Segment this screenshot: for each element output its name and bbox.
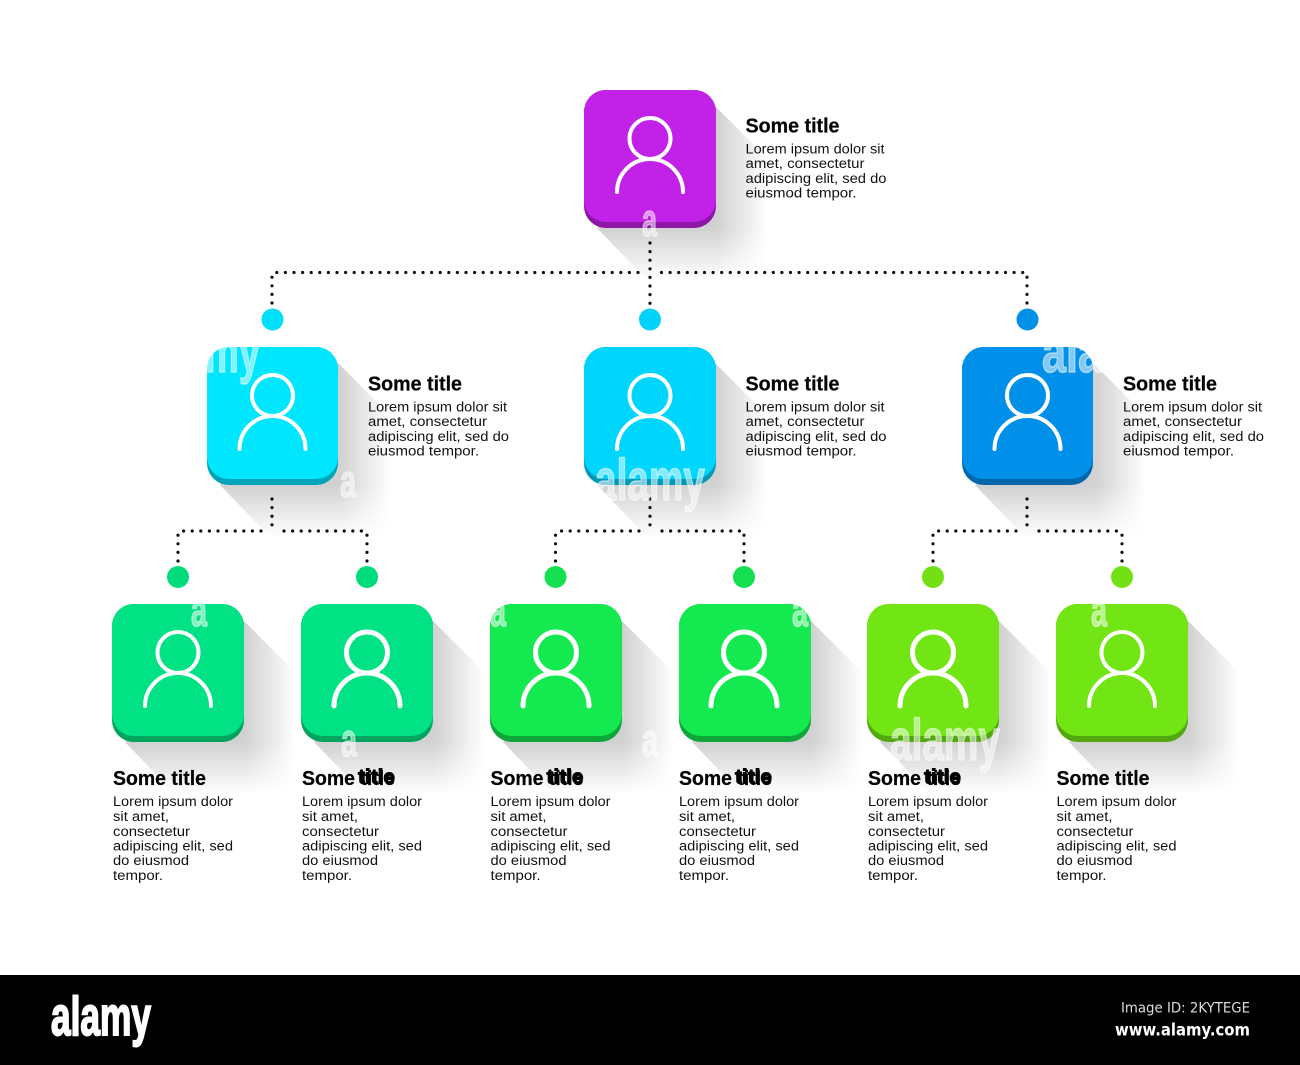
image watermarks: a xyxy=(642,194,657,246)
title: middle right: Some title xyxy=(1123,374,1217,396)
title: bottom 1: Some title xyxy=(113,768,206,790)
node: middle left xyxy=(207,347,509,537)
body: bottom 4: adipiscing elit, sed xyxy=(679,838,799,854)
connector dot: left xyxy=(262,308,284,330)
body: bottom 3 xyxy=(490,794,611,883)
image watermarks xyxy=(191,194,1107,773)
body: bottom 2: do eiusmod xyxy=(302,853,378,868)
body: top node: eiusmod tempor. xyxy=(746,186,856,200)
connector dot: centre xyxy=(639,308,661,330)
connector dot: bottom 4 xyxy=(733,566,755,588)
body: middle centre: eiusmod tempor. xyxy=(746,444,856,458)
body: bottom 5: do eiusmod xyxy=(868,853,944,868)
body: bottom 3: sit amet, xyxy=(490,809,546,824)
title smudge: bottom 4: title xyxy=(735,766,772,788)
title smudge: bottom 3: title xyxy=(546,766,584,788)
body: middle right: amet, consectetur xyxy=(1123,414,1243,429)
body: bottom 6: tempor. xyxy=(1056,868,1106,883)
body: top node: adipiscing elit, sed do xyxy=(746,171,886,186)
body: bottom 2: Lorem ipsum dolor xyxy=(302,794,423,809)
card: cyan person xyxy=(207,347,391,537)
title: top node: Some title xyxy=(746,116,840,138)
body: bottom 2: tempor. xyxy=(302,868,352,883)
body: bottom 6 xyxy=(1056,794,1177,883)
body: bottom 1: consectetur xyxy=(113,824,191,839)
title: bottom 3: Some title xyxy=(490,768,584,790)
body: bottom 6: adipiscing elit, sed xyxy=(1056,838,1176,854)
body: top node: Lorem ipsum dolor sit xyxy=(746,142,885,156)
title: bottom 5: Some title xyxy=(868,768,961,790)
node: bottom 3 xyxy=(490,604,674,883)
connector dot: bottom 2 xyxy=(356,566,378,588)
body: bottom 3: do eiusmod xyxy=(490,853,566,868)
card: sky person xyxy=(584,347,768,537)
body: bottom 2: sit amet, xyxy=(302,809,358,824)
body: middle centre: adipiscing elit, sed do xyxy=(746,429,886,444)
body: bottom 4: consectetur xyxy=(679,824,757,839)
body: bottom 1: tempor. xyxy=(113,868,163,883)
body: middle centre: Lorem ipsum dolor sit xyxy=(746,400,885,414)
image watermarks: ala xyxy=(1042,320,1103,385)
card: green person 2 xyxy=(301,604,485,794)
body: bottom 2: consectetur xyxy=(302,824,380,839)
image watermarks: a xyxy=(490,584,506,636)
body: middle left: adipiscing elit, sed do xyxy=(368,429,509,444)
card: green person 3 xyxy=(490,604,674,794)
body: bottom 5: Lorem ipsum dolor xyxy=(868,794,989,809)
body: bottom 4: tempor. xyxy=(679,868,729,883)
image watermarks: a xyxy=(1091,584,1107,636)
top level connector lines xyxy=(272,243,1027,304)
body: bottom 1: sit amet, xyxy=(113,809,169,824)
node: bottom 4 xyxy=(679,604,863,883)
card: blue person xyxy=(962,347,1146,537)
image watermarks: my xyxy=(205,320,260,385)
body: bottom 5: consectetur xyxy=(868,824,946,839)
body: bottom 5: sit amet, xyxy=(868,809,924,824)
body: bottom 3: Lorem ipsum dolor xyxy=(490,794,611,809)
body: bottom 4: sit amet, xyxy=(679,809,735,824)
node: bottom 5 xyxy=(867,604,1051,883)
body: bottom 6: sit amet, xyxy=(1056,809,1112,824)
node: middle centre xyxy=(584,347,886,537)
title: middle centre: Some title xyxy=(746,374,840,396)
title: middle left: Some title xyxy=(368,374,462,396)
card: green person 1 xyxy=(112,604,296,794)
node: middle right xyxy=(962,347,1264,537)
body: bottom 5: tempor. xyxy=(868,868,918,883)
body: bottom 1: adipiscing elit, sed xyxy=(113,838,233,854)
body: bottom 4: do eiusmod xyxy=(679,853,755,868)
body: bottom 5: adipiscing elit, sed xyxy=(868,838,988,854)
image watermarks: a xyxy=(642,714,658,766)
body: middle left: Lorem ipsum dolor sit xyxy=(368,400,507,414)
body: middle right xyxy=(1123,400,1264,458)
card: green person 4 xyxy=(679,604,863,794)
body: top node xyxy=(746,142,886,200)
node: bottom 1 xyxy=(112,604,296,883)
body: bottom 2 xyxy=(302,794,423,883)
right branch connector lines xyxy=(933,499,1122,561)
website: www.alamy.com xyxy=(1115,1020,1250,1040)
centre branch connector lines xyxy=(556,499,744,561)
body: bottom 1: Lorem ipsum dolor xyxy=(113,794,234,809)
body: middle right: eiusmod tempor. xyxy=(1123,444,1234,458)
footer bar xyxy=(0,975,1300,1065)
image watermarks: alamy xyxy=(890,708,1000,773)
left branch connector lines xyxy=(178,499,367,561)
image id: Image ID: 2KYTEGE xyxy=(1121,1000,1250,1016)
card: lime person 6 xyxy=(1056,604,1240,794)
body: top node: amet, consectetur xyxy=(746,156,865,171)
body: bottom 6: Lorem ipsum dolor xyxy=(1056,794,1177,809)
body: bottom 1 xyxy=(113,794,234,883)
body: bottom 1: do eiusmod xyxy=(113,853,189,868)
connector dot: bottom 1 xyxy=(167,566,189,588)
body: bottom 5 xyxy=(868,794,989,883)
image watermarks: a xyxy=(792,584,808,636)
title: bottom 4: Some title xyxy=(679,768,772,790)
body: bottom 3: tempor. xyxy=(490,868,540,883)
title smudge: bottom 5: title xyxy=(924,766,961,788)
body: middle centre xyxy=(746,400,886,458)
body: bottom 3: consectetur xyxy=(490,824,568,839)
title: bottom 2: Some title xyxy=(302,768,395,790)
body: bottom 2: adipiscing elit, sed xyxy=(302,838,422,854)
body: middle centre: amet, consectetur xyxy=(746,414,865,429)
image watermarks: a xyxy=(341,714,357,766)
node: bottom 6 xyxy=(1056,604,1240,883)
body: bottom 3: adipiscing elit, sed xyxy=(490,838,610,854)
title: bottom 6: Some title xyxy=(1056,768,1150,790)
card: purple person xyxy=(584,90,768,280)
title smudge: bottom 2: title xyxy=(358,766,395,788)
image watermarks: alamy xyxy=(595,448,705,513)
connector dot: bottom 5 xyxy=(922,566,944,588)
footer logo: alamy xyxy=(51,985,151,1047)
body: bottom 6: do eiusmod xyxy=(1056,853,1132,868)
image watermarks: a xyxy=(340,455,356,507)
body: middle right: adipiscing elit, sed do xyxy=(1123,429,1264,444)
body: middle left xyxy=(368,400,509,458)
connector dot: right xyxy=(1016,308,1038,330)
image watermarks: a xyxy=(191,584,207,636)
body: middle left: eiusmod tempor. xyxy=(368,444,479,458)
body: middle right: Lorem ipsum dolor sit xyxy=(1123,400,1262,414)
body: bottom 6: consectetur xyxy=(1056,824,1134,839)
node: bottom 2 xyxy=(301,604,485,883)
body: bottom 4 xyxy=(679,794,800,883)
connector dot: bottom 6 xyxy=(1111,566,1133,588)
node: top purple xyxy=(584,90,886,280)
body: bottom 4: Lorem ipsum dolor xyxy=(679,794,800,809)
connector dot: bottom 3 xyxy=(544,566,566,588)
card: lime person 5 xyxy=(867,604,1051,794)
body: middle left: amet, consectetur xyxy=(368,414,488,429)
